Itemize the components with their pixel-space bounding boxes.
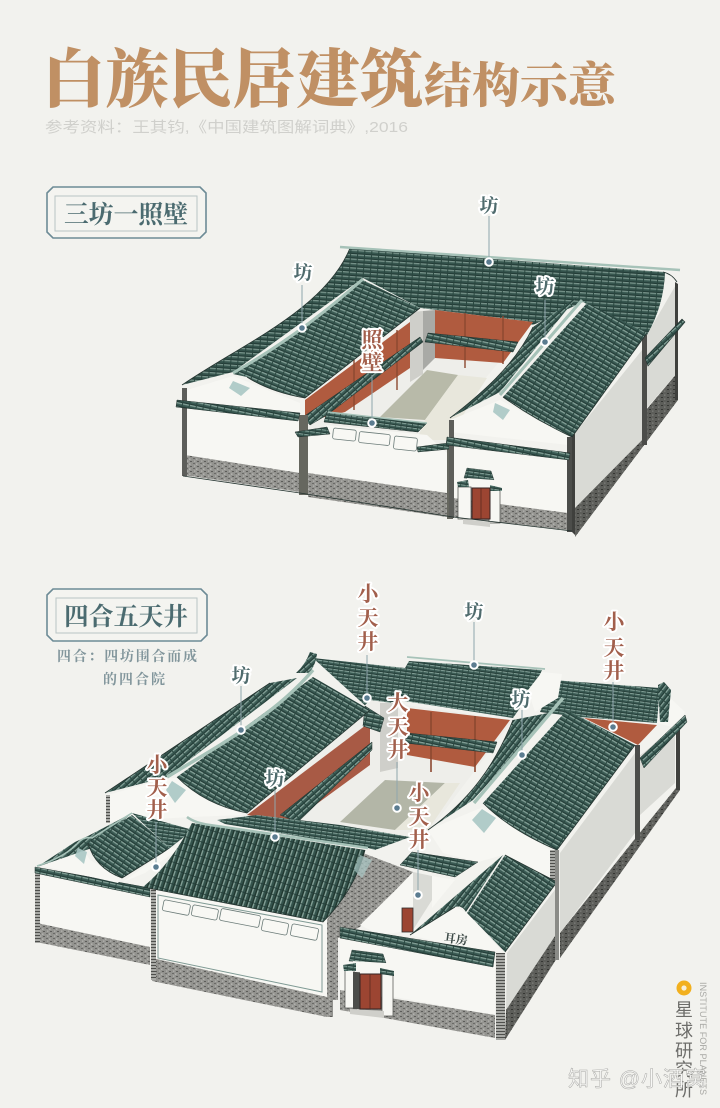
- label: 坊 front: [265, 768, 285, 841]
- label: 小天井 rear right: [604, 610, 626, 731]
- left small roof: [37, 813, 193, 883]
- far canopy on side wall: [645, 319, 685, 366]
- label: 坊 rear: [464, 601, 484, 669]
- label: 坊 west: 坊: [231, 665, 251, 687]
- label: 大天井: [388, 691, 408, 812]
- rear roof: [313, 657, 562, 718]
- label: 小天井 centre: 小: [408, 781, 432, 805]
- screen wall with roof and panels: [295, 412, 453, 519]
- label: left 坊: 坊: [293, 262, 313, 284]
- front main roof: [143, 815, 410, 922]
- left wing inner roof slope: [233, 279, 420, 398]
- label: 坊 front: 坊: [265, 768, 285, 790]
- label: 小天井 rear left: [358, 582, 380, 702]
- label: 小天井 rear right: 小: [604, 610, 626, 634]
- left front gable and wall: [176, 376, 308, 495]
- logo: 星球研究所: 研: [675, 1041, 693, 1061]
- far right side wall: [571, 282, 678, 537]
- label: 照壁: [362, 328, 384, 427]
- logo: 星球研究所: INSTITUTE FOR PLANETS: [698, 982, 708, 1095]
- base shadow of front: [183, 476, 572, 531]
- title: 白族民居建筑: [42, 45, 423, 116]
- label: 照壁: 壁: [362, 351, 382, 375]
- watermark: 知乎 @小酒窝: [568, 1068, 706, 1091]
- label: 坊 west: [231, 665, 251, 734]
- label: 小天井 left: 天: [146, 776, 168, 800]
- label: 照壁: 照: [362, 328, 384, 352]
- courtyard interior: [247, 700, 513, 850]
- label: 小天井 left: 井: [146, 798, 168, 822]
- west wing: [105, 652, 370, 823]
- ear room: [410, 850, 559, 1040]
- left small house wall: [35, 867, 150, 965]
- label: 坊 east: 坊: [511, 689, 531, 711]
- logo: 星球研究所: [675, 980, 708, 1100]
- label: 小天井 rear left: 天: [358, 606, 378, 630]
- label: 坊 rear: 坊: [464, 601, 484, 623]
- label: 小天井 centre: 井: [408, 828, 430, 852]
- label: 小天井 centre: [408, 781, 432, 899]
- right gable and front wall: [446, 400, 572, 532]
- labels lower house: [146, 582, 626, 899]
- label: 坊 east: [511, 689, 531, 759]
- east wing: [428, 698, 635, 885]
- illustration: 四合五天井 courtyard house: [35, 582, 687, 1040]
- logo: 星球研究所: 星: [675, 1000, 693, 1020]
- label: right 坊: [535, 276, 555, 346]
- label: 小天井 rear left: 小: [358, 582, 380, 606]
- note: 四合 definition: 四合：四坊围合而成: [57, 648, 197, 665]
- logo: 星球研究所: 究: [675, 1060, 693, 1080]
- label: 小天井 centre: 天: [408, 805, 430, 829]
- screen panels: [332, 428, 418, 451]
- note: 四合 definition: [57, 648, 197, 688]
- label: right 坊: 坊: [535, 276, 555, 298]
- label: rear 坊: 坊: [479, 195, 499, 217]
- label: 大天井: 井: [388, 738, 408, 762]
- label: left 坊: [293, 262, 313, 332]
- label: 小天井 rear right: 井: [604, 659, 624, 683]
- front main wall: [151, 888, 333, 1017]
- heading box: 三坊一照壁: 三坊一照壁: [64, 201, 188, 229]
- back roof: [182, 247, 680, 385]
- front right house wall: [340, 927, 505, 1040]
- label: 大天井: 大: [388, 691, 408, 715]
- text: 耳房: 耳房: [443, 930, 469, 948]
- courtyard interior: [300, 308, 533, 455]
- logo: 星球研究所: 所: [675, 1080, 693, 1100]
- title: 结构示意: [424, 59, 620, 113]
- heading box: 三坊一照壁: [47, 187, 206, 238]
- label: 小天井 left: 小: [146, 753, 170, 777]
- illustration: 三坊一照壁 courtyard house: [176, 195, 685, 537]
- front door: [457, 468, 502, 527]
- heading box: 四合五天井: 四合五天井: [64, 603, 188, 631]
- label: rear 坊: [479, 195, 499, 266]
- wall panels: [162, 900, 319, 941]
- inner canopies: [303, 333, 518, 425]
- logo: 星球研究所: 球: [675, 1021, 693, 1041]
- label: 大天井: 天: [388, 715, 408, 739]
- labels top house: [293, 195, 555, 427]
- inner small court: [327, 852, 478, 1000]
- far right walls: [560, 712, 680, 958]
- label: 小天井 left: [146, 753, 170, 871]
- heading box: 四合五天井: [47, 589, 207, 641]
- rear right roof: [540, 680, 687, 768]
- label: 小天井 rear left: 井: [358, 630, 378, 654]
- icon: yellow circle: [676, 980, 692, 996]
- note: 四合 definition: 的四合院: [103, 671, 165, 688]
- front door: [343, 950, 394, 1018]
- subtitle: source: 参考资料：王其钧,《中国建筑图解词典》,2016: [45, 119, 408, 136]
- label: 小天井 rear right: 天: [604, 636, 624, 660]
- right wing roofs: [450, 297, 647, 437]
- title: [42, 45, 620, 116]
